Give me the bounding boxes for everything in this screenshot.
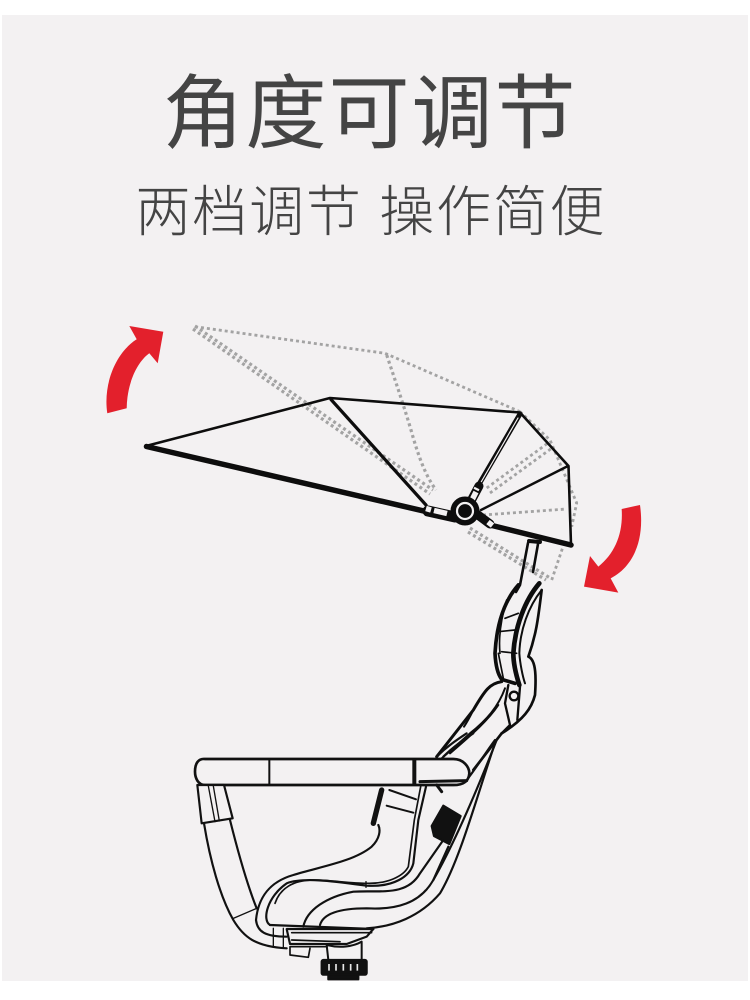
base plate bbox=[287, 929, 373, 944]
side bracket bbox=[373, 790, 382, 823]
seat frame bbox=[195, 733, 497, 979]
canopy ribs bbox=[331, 400, 426, 505]
canopy lowered position bbox=[146, 398, 571, 545]
tension knob bbox=[322, 960, 367, 975]
seat back upper bbox=[437, 682, 502, 757]
canopy outline bbox=[146, 398, 571, 545]
subtitle: 两档调节 操作简便 bbox=[136, 181, 606, 243]
title: 角度可调节 bbox=[162, 70, 578, 160]
rear mechanism and backrest bbox=[437, 583, 542, 770]
joint bbox=[510, 692, 518, 700]
canopy front edge bbox=[146, 446, 571, 545]
front sleeve bbox=[197, 785, 233, 823]
black adjuster bbox=[432, 806, 461, 844]
seat cushion bbox=[256, 825, 379, 920]
rib joints bbox=[428, 511, 455, 517]
arrow: red up bbox=[106, 326, 163, 413]
canopy raised position, dotted outline bbox=[193, 326, 577, 580]
hinge bbox=[451, 497, 479, 525]
headrest pad bbox=[495, 585, 518, 683]
support post bbox=[516, 541, 540, 592]
dark padded stripes bbox=[513, 583, 539, 685]
arrow: red down bbox=[584, 505, 641, 593]
front tube bbox=[204, 823, 287, 948]
backrest rails bbox=[437, 733, 473, 757]
armrest bar bbox=[195, 759, 469, 785]
